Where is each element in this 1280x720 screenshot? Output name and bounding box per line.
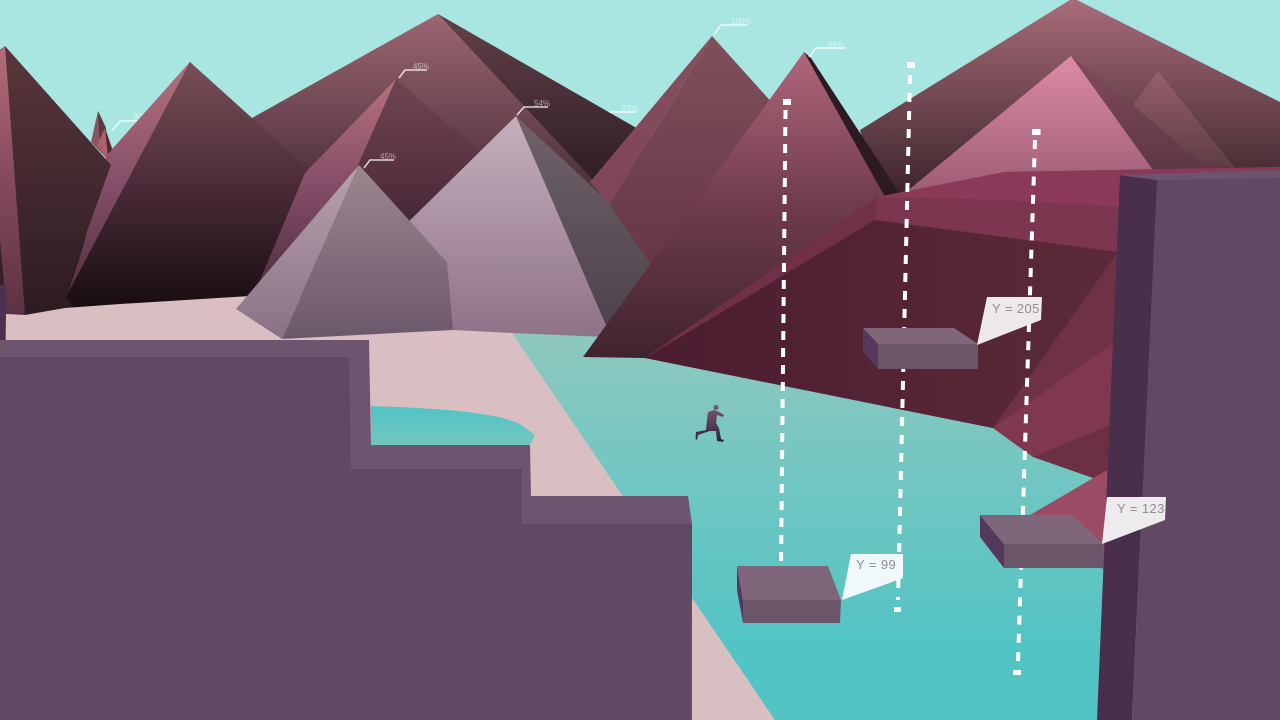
mountain: grey pyramid (236, 165, 453, 339)
dashed line: block Y = 99 (781, 99, 791, 568)
mountain: third peak (258, 79, 610, 320)
platform: Y = 205 (863, 328, 978, 369)
sand ground (0, 296, 776, 720)
callout: Y = 205: Y = 205 (992, 301, 1040, 316)
water (512, 320, 1120, 720)
platform: Y = 123 (980, 515, 1103, 568)
callout: 45% grey peak: 45% (380, 152, 396, 161)
callout: hidden peak label 80%: 80% (133, 112, 149, 121)
percent labels (364, 17, 845, 168)
mountain: second peak (66, 62, 330, 312)
dashed line: block Y = 123 (1013, 129, 1040, 675)
callout: Y = 123: Y = 123 (1117, 501, 1165, 516)
dashed line: block Y = 205 (894, 62, 915, 612)
callout: 91%: 91% (622, 104, 638, 113)
callout: 91% (609, 104, 638, 113)
hillside: pink wedge (1030, 470, 1108, 570)
mountain: 88% peak (583, 52, 900, 358)
mountain: left edge peak (0, 46, 111, 340)
red hillside (645, 167, 1280, 560)
mountain: 100% peak (590, 36, 810, 285)
callout: Y = 123 (1102, 497, 1166, 544)
callout: 100% (714, 17, 751, 35)
callout: 54% pale peak (517, 99, 550, 115)
mountain: pale pyramid (390, 116, 660, 337)
mountain: pink peak (905, 56, 1153, 193)
callout: Y = 99: Y = 99 (856, 557, 896, 572)
callout: 45% rear peak (399, 62, 429, 78)
callout: 88%: 88% (828, 40, 844, 49)
callout: 45% grey peak (364, 152, 396, 168)
callout: Y = 205 (977, 297, 1042, 345)
icon: distant spikes (91, 111, 113, 160)
callout: 100%: 100% (731, 17, 751, 26)
callout: Y = 99 (842, 554, 903, 600)
right cliff (1097, 170, 1280, 720)
mountain: central peak (200, 14, 700, 340)
left stepped cliff (0, 340, 692, 720)
platform: Y = 99 (737, 566, 841, 623)
callout: 45% rear peak: 45% (413, 62, 429, 71)
icon: running figure (696, 405, 724, 442)
callout: 54% pale peak: 54% (534, 99, 550, 108)
mountain: far right peak (860, 0, 1280, 210)
callout: hidden peak label 80% (112, 112, 149, 131)
callout: 88% (809, 40, 845, 57)
pond (371, 406, 535, 445)
